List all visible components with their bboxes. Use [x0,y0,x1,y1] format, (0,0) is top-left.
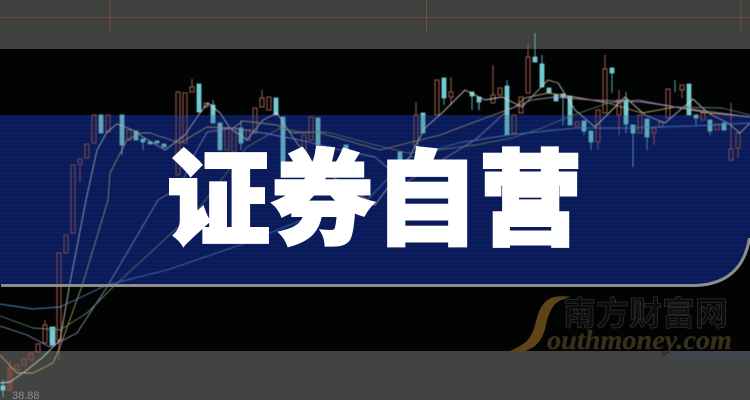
panel tint over chart [0,115,750,285]
blue panel [0,115,750,285]
watermark: outhmoney.com [547,325,732,355]
panel scan lines [0,115,750,285]
bottom grey band [0,351,750,400]
watermark: 南方财富网 [563,295,728,332]
moving average lines [0,80,750,383]
watermark swoosh [508,296,571,352]
panel border [1,238,750,286]
title: 证券自营 [167,143,583,258]
top grey band [0,0,750,49]
watermark [508,295,732,355]
